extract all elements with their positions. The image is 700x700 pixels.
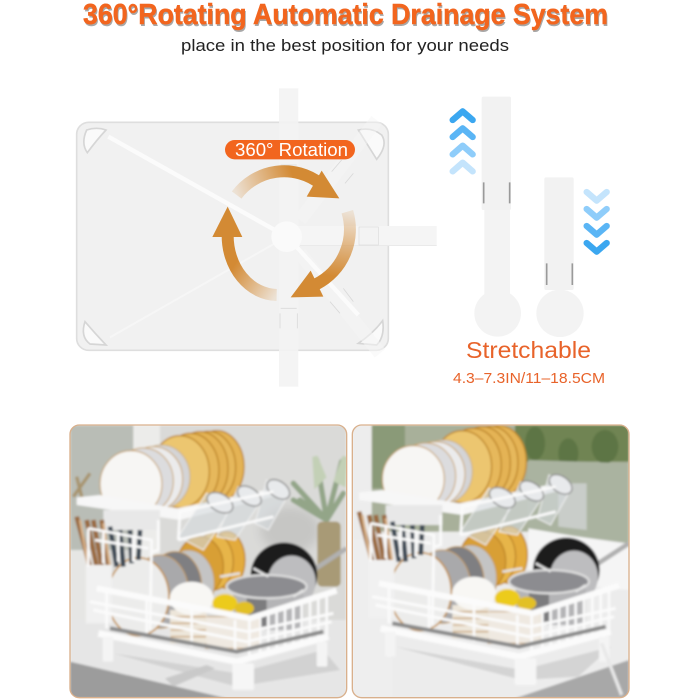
- photo: rack by window, left: [70, 425, 347, 700]
- icon: up chevrons: [453, 111, 473, 171]
- panel: stretchable arms: [453, 97, 607, 337]
- faded rotating arm positions: [108, 88, 380, 387]
- retracted arm: [536, 177, 584, 337]
- stretchable heading: Stretchable: [466, 337, 591, 363]
- badge background: [225, 140, 355, 159]
- main arm: [271, 221, 437, 252]
- badge label: 360° Rotation: [235, 140, 348, 160]
- tray body: [77, 122, 388, 350]
- stretch dimensions: 4.3–7.3IN/11–18.5CM: [453, 371, 605, 387]
- subtitle: place in the best position for your needs: [181, 36, 509, 55]
- extended arm: [474, 97, 521, 337]
- rotation arrows: [212, 171, 350, 297]
- panel: rotating drain tray: [77, 88, 437, 387]
- tray corner feet: [83, 128, 384, 345]
- icon: down chevrons: [587, 192, 607, 252]
- title: 360°Rotating Automatic Drainage System: [84, 1, 609, 33]
- photo: rack by window, right: [352, 425, 629, 698]
